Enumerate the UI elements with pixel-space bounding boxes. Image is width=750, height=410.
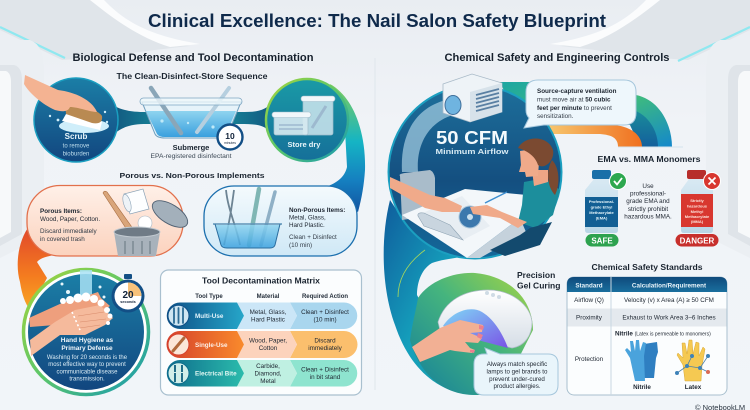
heading: precision gel curing: Precision [517, 270, 555, 280]
row: electrical bite [167, 360, 357, 386]
text: non-porous items: Hard Plastic. [289, 222, 325, 229]
subheading: sequence: The Clean-Disinfect-Store Sequence [116, 72, 268, 81]
icon: latex glove with molecules: Latex [685, 384, 702, 391]
text: hand hygiene [47, 337, 128, 382]
icon: washing hands [29, 282, 113, 356]
step: store dry [266, 79, 348, 161]
text: use EMA not MMA: hazardous MMA. [624, 214, 672, 220]
text: hand hygiene: Primary Defense [61, 345, 113, 352]
callout: source-capture ventilation: must move air at 50 cubic [537, 96, 611, 104]
heading: biological defense: Biological Defense and Tool Decontamination [72, 52, 314, 64]
heading: precision gel curing: Gel Curing [517, 280, 560, 290]
text: hand hygiene: communicable disease [56, 370, 118, 376]
icon: tools in disinfectant bowl [213, 189, 282, 248]
text: hand hygiene: Washing for 20 seconds is the [47, 355, 128, 361]
table header: Standard [575, 282, 603, 290]
ribbon: porous panel to hand hygiene [18, 225, 55, 310]
bottle: MMA danger: hazardous [687, 204, 708, 208]
row: electrical bite: Carbide, [256, 363, 280, 370]
text: non-porous items: Non-Porous Items: [289, 207, 345, 214]
icon: nitrile gloves: Nitrile [633, 384, 651, 391]
icon: stopwatch 20 seconds [112, 274, 144, 312]
panel: clean-disinfect-store sequence [24, 72, 365, 212]
text: porous items: Discard immediately [40, 228, 98, 235]
callout: match lamps to gel brands: product allergies. [493, 383, 541, 390]
arc ribbons: ventilation to monomers [500, 82, 683, 147]
table header: Calculation/Requirement [632, 282, 707, 290]
text: 50 CFM: 50 CFM [436, 127, 508, 148]
text: use EMA not MMA: Use [642, 183, 654, 190]
text: non-porous items: (10 min) [289, 242, 312, 249]
matrix column headers: Required Action [302, 294, 348, 300]
ribbon connecting sequence steps [110, 100, 275, 137]
callout: match lamps to gel brands: prevent under-cured [489, 376, 545, 383]
row: multi-use: Hard Plastic [251, 316, 285, 324]
step: scrub: bioburden [63, 152, 89, 158]
text: porous items [40, 208, 100, 243]
panel: tool decontamination matrix [160, 270, 362, 395]
bottle: EMA safe [585, 170, 626, 246]
icon: source-capture ventilation unit [443, 74, 502, 122]
bottle: MMA danger: Methacrylate [685, 214, 710, 219]
panel: non-porous items [204, 186, 357, 256]
callout: source-capture ventilation: feet per minute to prevent [537, 105, 612, 112]
row: single-use: Single-Use [195, 342, 228, 349]
heading: EMA vs MMA: EMA vs. MMA Monomers [598, 155, 701, 164]
bottle: MMA danger: Methyl [691, 209, 703, 214]
row: airflow: Velocity (v) x Area (A) ≥ 50 CFM [624, 297, 714, 304]
row: multi-use [167, 302, 357, 329]
row: single-use [166, 331, 358, 358]
callout: match lamps to gel brands [474, 348, 558, 395]
icon: trash can with porous items [103, 189, 192, 256]
callout: match lamps to gel brands: Always match specific [487, 361, 547, 368]
text: hand hygiene: Hand Hygiene as [61, 337, 114, 344]
row: single-use: Wood, Paper, [249, 338, 287, 344]
row: protection: Protection [575, 356, 604, 363]
row: protection: Nitrile (Latex is permeable to monomers) [615, 330, 711, 338]
text: non-porous items: Metal, Glass, [289, 214, 326, 222]
bottle: EMA safe: Methacrylate [589, 210, 614, 215]
matrix column headers: Tool Type [195, 294, 223, 300]
text: use EMA not MMA: strictly prohibit [628, 206, 668, 213]
bottle: EMA safe: (EMA) [596, 216, 608, 220]
heading: chemical safety: Chemical Safety and Engineering Controls [444, 52, 670, 64]
bottle: MMA danger: Strictly [690, 198, 705, 203]
row: multi-use: Metal, Glass, [250, 309, 287, 316]
bottle: EMA safe: grade Ethyl [591, 204, 612, 210]
text: hand hygiene: most effective way to prevent [48, 362, 126, 368]
bottle: MMA danger: DANGER [680, 236, 715, 246]
icon: hand under lamp [412, 320, 484, 362]
matrix column headers: Material [257, 294, 280, 300]
subheading: porous vs non-porous: Porous vs. Non-Porous Implements [120, 171, 264, 180]
ribbon: ventilation to gel curing [384, 200, 485, 395]
row: electrical bite: in bit stand [310, 374, 341, 381]
badge: 10 minutes: minutes [224, 141, 236, 145]
icon: stopwatch 20 seconds: seconds [120, 300, 136, 304]
panel: EMA vs MMA monomers [585, 155, 720, 246]
label: submerge: EPA-registered disinfectant [150, 154, 232, 160]
text: non-porous items: Clean + Disinfect [289, 234, 337, 241]
illustration: technician at ventilated table [390, 138, 560, 258]
row: single-use: immediately [308, 345, 343, 352]
step: submerge bowl [140, 88, 242, 138]
row: airflow: Airflow (Q) [574, 297, 604, 304]
row: proximity: Exhaust to Work Area 3–6 Inches [622, 314, 716, 322]
bottle: MMA danger: (MMA) [691, 219, 704, 224]
panel: 50 CFM ventilation scene [388, 74, 636, 258]
panel: porous items [27, 186, 192, 256]
row: single-use: Discard [314, 338, 336, 344]
text: 50 CFM [436, 127, 509, 156]
row: proximity [576, 314, 716, 322]
bottle: MMA danger [676, 170, 720, 246]
badge: 10 minutes: 10 [225, 131, 235, 141]
ribbon from store dry to non-porous panel [325, 84, 365, 212]
text: use EMA not MMA: grade EMA and [626, 198, 670, 205]
row: protection [575, 330, 711, 391]
table: chemical safety standards [567, 277, 727, 395]
step: scrub: Scrub [65, 132, 87, 141]
bottle: EMA safe: Professional- [589, 199, 615, 204]
label: submerge [150, 143, 232, 160]
title: Clinical Excellence: The Nail Salon Safety Blueprint [148, 10, 606, 31]
row: electrical bite: Electrical Bite [195, 370, 237, 378]
panel: precision gel curing [410, 270, 560, 395]
row: multi-use: Multi-Use [195, 313, 224, 320]
text: 50 CFM: Minimum Airflow [436, 147, 509, 156]
step: store dry: Store dry [288, 140, 321, 149]
text: porous items: Porous Items: [40, 208, 82, 215]
row: airflow [574, 297, 714, 304]
row: multi-use: Clean + Disinfect [301, 309, 349, 316]
badge: 10 minutes [218, 124, 242, 150]
heading: chemical safety standards: Chemical Safety Standards [592, 262, 703, 272]
matrix title: Tool Decontamination Matrix [202, 276, 320, 286]
heading: precision gel curing [517, 270, 560, 290]
step: scrub [24, 75, 118, 162]
disc: gel curing background [410, 273, 533, 395]
text: porous items: in covered trash [40, 236, 85, 243]
text: non-porous items [289, 207, 345, 249]
row: electrical bite: Diamond, [255, 370, 282, 378]
step: scrub: to remove [63, 144, 90, 150]
row: single-use: Cotton [259, 345, 278, 352]
callout: source-capture ventilation: Source-capture ventilation [537, 88, 617, 95]
row: electrical bite: Clean + Disinfect [301, 366, 349, 374]
row: multi-use: (10 min) [313, 316, 337, 324]
row: electrical bite: Metal [260, 378, 276, 385]
icon: water stream [80, 270, 92, 300]
text: hand hygiene: transmission. [69, 376, 105, 382]
text: use EMA not MMA [624, 183, 672, 220]
bottle: EMA safe: SAFE [591, 236, 613, 246]
icon: stopwatch 20 seconds: 20 [122, 290, 134, 301]
callout: source-capture ventilation [524, 80, 636, 128]
label: submerge: Submerge [173, 143, 209, 152]
airflow swoosh [402, 100, 450, 172]
text: use EMA not MMA: professional- [630, 190, 666, 198]
text: porous items: Wood, Paper, Cotton. [40, 216, 100, 223]
panel: hand hygiene [22, 268, 150, 396]
callout: source-capture ventilation: sensitization. [537, 113, 574, 120]
row: proximity: Proximity [576, 314, 603, 322]
callout: match lamps to gel brands: lamps to gel brands to [487, 368, 548, 376]
table header [567, 277, 727, 292]
icon: UV lamp [438, 290, 532, 348]
matrix column headers [195, 294, 348, 300]
